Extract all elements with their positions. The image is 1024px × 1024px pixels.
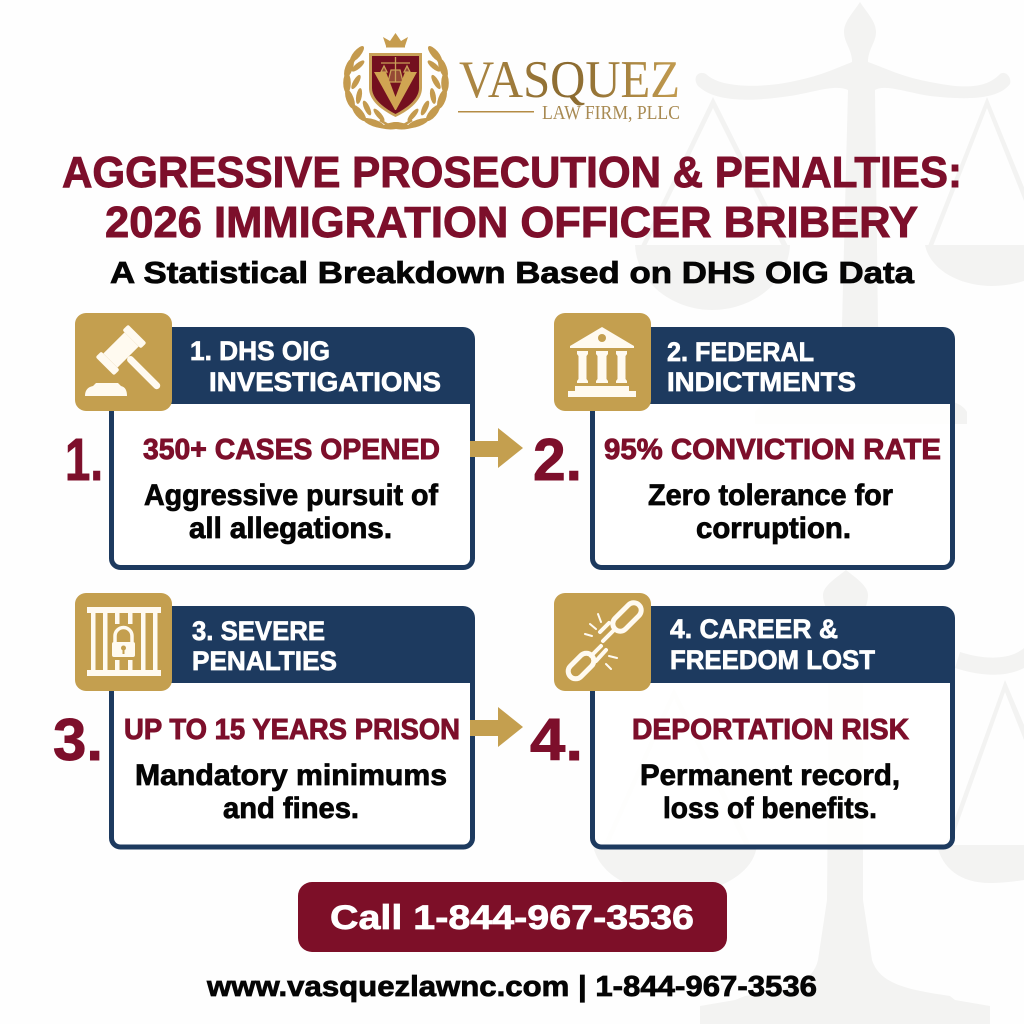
panel 2: federal indictments [533,313,955,568]
title: 2026 IMMIGRATION OFFICER BRIBERY [105,198,918,247]
step number 3: 3. [53,707,103,773]
header text [190,336,441,397]
header text: FREEDOM LOST [670,645,875,675]
step number 4: 4. [530,707,583,773]
step number 2: 2. [533,427,582,493]
call button [298,882,727,952]
description [648,479,893,545]
description: Permanent record, [640,759,900,792]
title: AGGRESSIVE PROSECUTION & PENALTIES: [62,148,962,197]
call button: Call 1-844-967-3536 [330,899,694,937]
footer contact line: www.vasquezlawnc.com | 1-844-967-3536 [206,971,817,1003]
card header band [150,606,475,683]
header text: 2. FEDERAL [667,337,814,367]
logo [342,33,680,130]
description [640,759,900,825]
header text: 4. CAREER & [670,614,838,644]
background watermark: lower scales [593,570,1024,1024]
header text: INVESTIGATIONS [209,367,441,397]
header text [667,337,856,397]
statistic: DEPORTATION RISK [632,714,909,746]
card body [112,619,472,847]
description [135,759,447,825]
description [144,479,439,545]
icon tile: courthouse [554,313,651,411]
card body [112,340,472,568]
header text: PENALTIES [192,646,337,676]
description: Mandatory minimums [135,759,447,792]
logo: firm name: VASQUEZ [459,51,680,109]
arrow: step 3 to 4 [470,707,523,747]
header text [192,616,337,676]
header text: 1. DHS OIG [190,336,330,366]
header text [670,614,875,675]
description: and fines. [223,792,359,825]
icon tile: locked cell [75,593,172,691]
logo: gold rule [458,111,534,112]
statistic: 350+ CASES OPENED [143,434,440,466]
icon tile: gavel [75,313,175,411]
step number 1: 1. [65,427,103,493]
statistic: UP TO 15 YEARS PRISON [124,714,460,746]
description: Zero tolerance for [648,479,893,512]
icon tile: broken chain [554,593,651,691]
logo: shield [369,53,422,117]
background watermark: upper scales [635,2,1024,424]
panel 4: career and freedom lost [530,593,955,847]
description: corruption. [696,512,851,545]
description: all allegations. [189,512,392,545]
statistic: 95% CONVICTION RATE [604,434,941,466]
arrow: step 1 to 2 [470,428,523,468]
panel 1: DHS OIG investigations [65,313,475,568]
description: Aggressive pursuit of [144,479,439,512]
subtitle: A Statistical Breakdown Based on DHS OIG Data [110,255,915,290]
description: loss of benefits. [663,792,877,825]
card body [592,619,952,847]
panel 3: severe penalties [53,593,475,847]
header text: 3. SEVERE [192,616,325,646]
card header band [150,327,475,404]
logo: crown [383,33,408,48]
logo: wreath [342,44,450,130]
card header band [630,606,955,683]
logo: firm subtitle: LAW FIRM, PLLC [542,102,680,124]
title [62,148,962,247]
header text: INDICTMENTS [667,367,856,397]
card header band [630,327,955,404]
card body [592,340,952,568]
